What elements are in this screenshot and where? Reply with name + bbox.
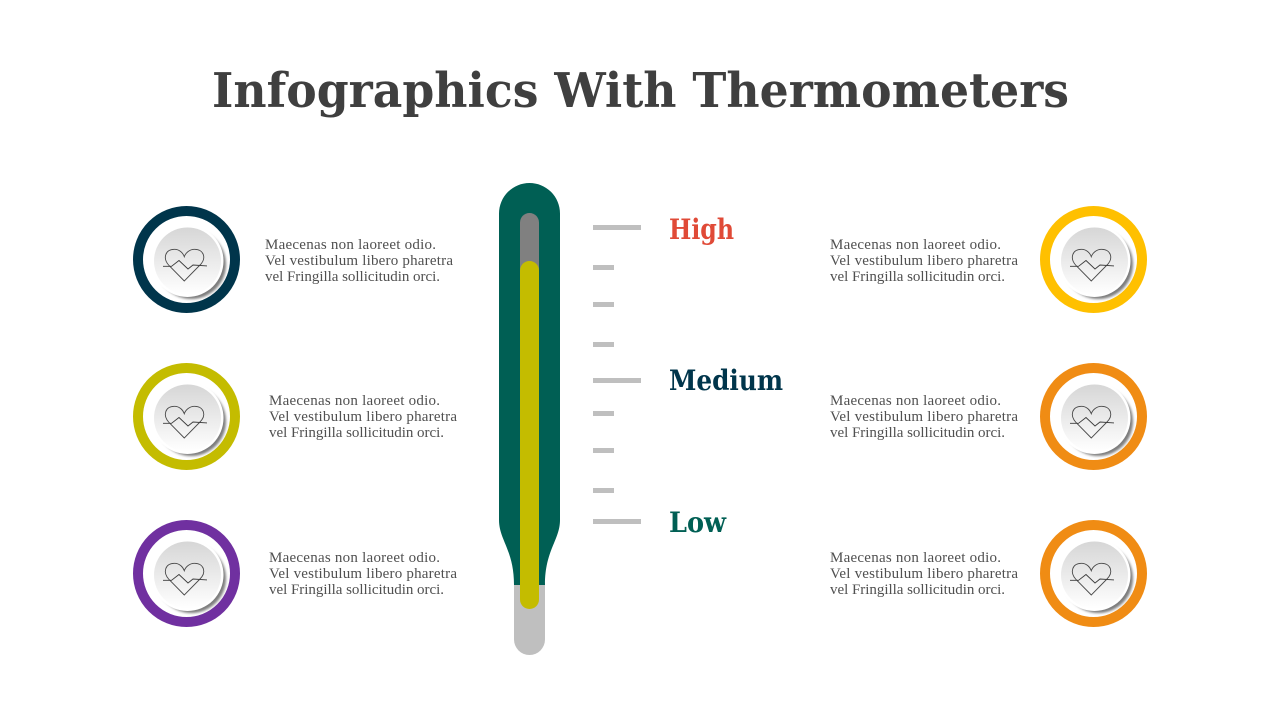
- text block: left top: Vel vestibulum libero pharetra: [265, 253, 453, 269]
- text block: left top: vel Fringilla sollicitudin orci.: [265, 269, 440, 285]
- item: orange circle icon: [1045, 368, 1142, 465]
- text block: right bottom: Vel vestibulum libero pharetra: [830, 566, 1018, 582]
- item: olive circle icon: [138, 368, 235, 465]
- item: purple circle icon: [138, 525, 235, 622]
- text block: left middle: Vel vestibulum libero pharetra: [269, 409, 457, 425]
- text block: left bottom: Maecenas non laoreet odio.: [269, 550, 440, 566]
- thermometer body: [499, 183, 560, 585]
- text block: right middle: Vel vestibulum libero pharetra: [830, 409, 1018, 425]
- item: navy circle icon: [138, 211, 235, 308]
- mercury level: [520, 261, 539, 609]
- text block: right top: vel Fringilla sollicitudin orci.: [830, 269, 1005, 285]
- text block: left middle: [269, 393, 457, 441]
- thermometer tube: [520, 213, 539, 313]
- label: Medium: Medium: [669, 364, 783, 397]
- thermometer bulb: [514, 580, 545, 655]
- item: orange circle icon bottom: [1045, 525, 1142, 622]
- text block: left bottom: Vel vestibulum libero pharetra: [269, 566, 457, 582]
- text block: left top: [265, 237, 453, 285]
- item: yellow circle icon: [1045, 211, 1142, 308]
- thermometer: [499, 183, 560, 655]
- text block: right bottom: vel Fringilla sollicitudin orci.: [830, 582, 1005, 598]
- text block: right top: Vel vestibulum libero pharetra: [830, 253, 1018, 269]
- text block: left bottom: [269, 550, 457, 598]
- title: Infographics With Thermometers: [212, 63, 1069, 119]
- text block: left middle: vel Fringilla sollicitudin orci.: [269, 425, 444, 441]
- text block: left bottom: vel Fringilla sollicitudin orci.: [269, 582, 444, 598]
- text block: right middle: Maecenas non laoreet odio.: [830, 393, 1001, 409]
- text block: right middle: [830, 393, 1018, 441]
- text block: left middle: Maecenas non laoreet odio.: [269, 393, 440, 409]
- text block: right bottom: Maecenas non laoreet odio.: [830, 550, 1001, 566]
- text block: right top: Maecenas non laoreet odio.: [830, 237, 1001, 253]
- text block: right top: [830, 237, 1018, 285]
- label: High: High: [669, 213, 734, 246]
- label: Low: Low: [669, 506, 727, 539]
- text block: right middle: vel Fringilla sollicitudin orci.: [830, 425, 1005, 441]
- scale ticks: [593, 225, 641, 524]
- text block: left top: Maecenas non laoreet odio.: [265, 237, 436, 253]
- text block: right bottom: [830, 550, 1018, 598]
